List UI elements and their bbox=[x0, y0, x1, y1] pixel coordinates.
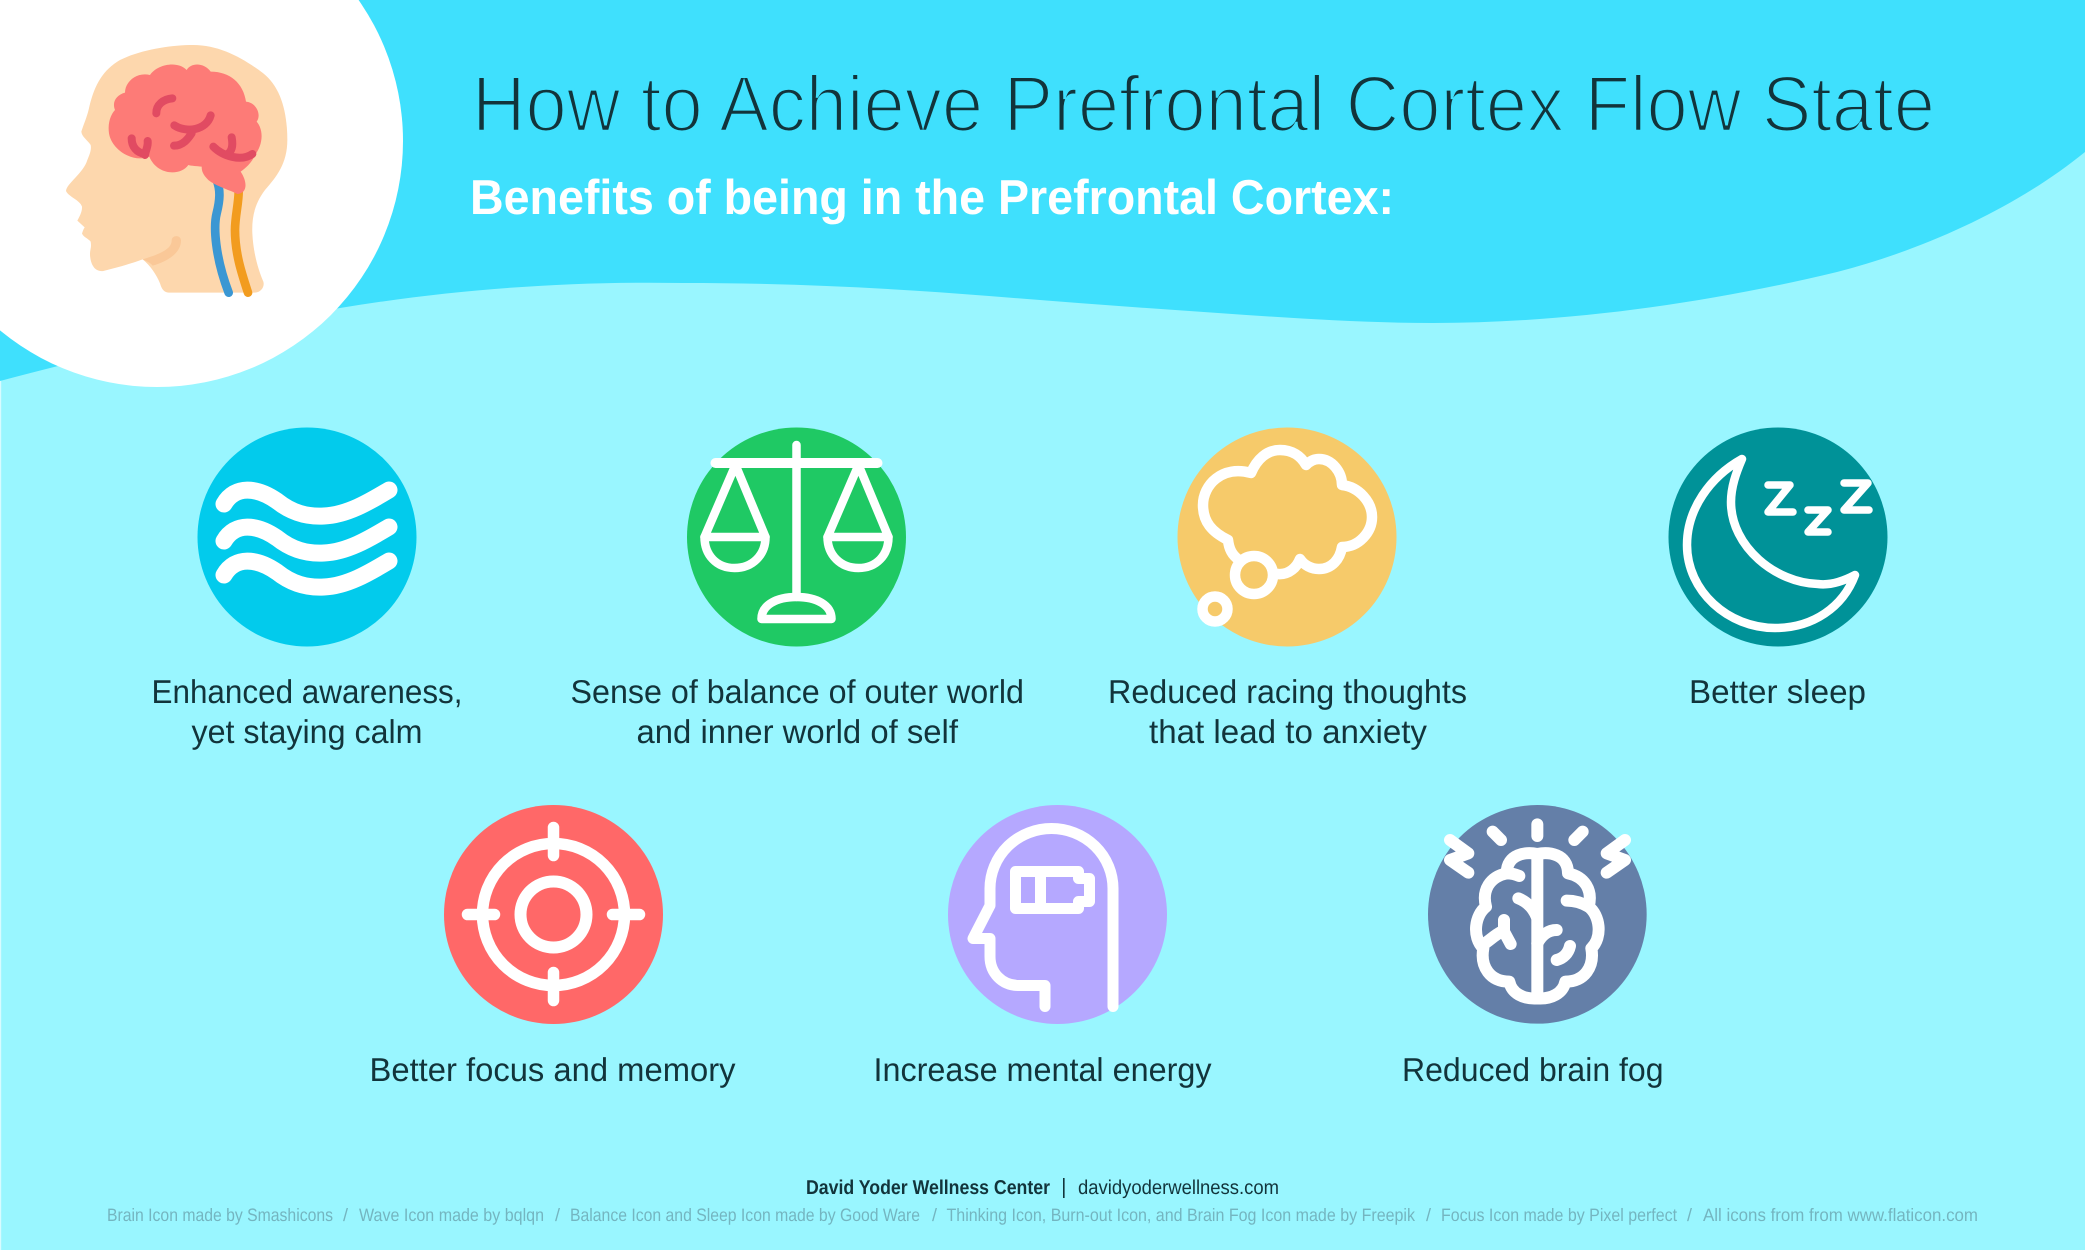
icon: waves bbox=[198, 428, 416, 646]
benefit: better sleep bbox=[1668, 428, 1888, 710]
caption: Sense of balance of outer world bbox=[570, 673, 1024, 710]
jaw shadow bbox=[143, 236, 181, 266]
footer: icon credits: / bbox=[343, 1205, 348, 1225]
footer: icon credits: Balance Icon and Sleep Icon made by Good Ware bbox=[570, 1205, 920, 1225]
icon: target bbox=[444, 805, 663, 1024]
caption: Better sleep bbox=[1689, 673, 1866, 710]
benefit: enhanced awareness bbox=[152, 428, 462, 750]
caption: that lead to anxiety bbox=[1149, 713, 1427, 750]
benefit: increase mental energy bbox=[874, 805, 1212, 1088]
caption: Reduced racing thoughts bbox=[1108, 673, 1467, 710]
icon: thought bubble bbox=[1178, 428, 1396, 646]
benefit: better focus and memory bbox=[370, 805, 736, 1088]
icon: head with brain bbox=[66, 45, 287, 293]
benefit: reduced racing thoughts bbox=[1108, 428, 1467, 750]
orange nerve bbox=[235, 192, 248, 293]
caption bbox=[570, 673, 1024, 750]
footer: icon credits: All icons from from www.flaticon.com bbox=[1703, 1205, 1978, 1225]
caption: Reduced brain fog bbox=[1402, 1051, 1664, 1088]
footer: icon credits: / bbox=[1687, 1205, 1692, 1225]
footer: icon credits: Wave Icon made by bqlqn bbox=[359, 1205, 544, 1225]
footer: icon credits: / bbox=[555, 1205, 560, 1225]
blue nerve bbox=[215, 180, 229, 293]
footer: organisation name and website: David Yoder Wellness Center bbox=[806, 1177, 1050, 1199]
footer: organisation name and website bbox=[806, 1177, 1279, 1199]
footer: icon credits: / bbox=[1426, 1205, 1431, 1225]
caption: Increase mental energy bbox=[874, 1051, 1212, 1088]
brain bbox=[109, 65, 262, 194]
white circle behind head bbox=[0, 0, 403, 387]
footer: icon credits: / bbox=[932, 1205, 937, 1225]
benefit: reduced brain fog bbox=[1402, 805, 1664, 1088]
footer: icon credits: Focus Icon made by Pixel perfect bbox=[1441, 1205, 1677, 1225]
icon: balance scale bbox=[687, 428, 906, 646]
title: How to Achieve Prefrontal Cortex Flow State bbox=[472, 59, 1935, 148]
icon: moon and zzz bbox=[1668, 428, 1888, 646]
benefit: sense of balance bbox=[570, 428, 1024, 750]
caption bbox=[152, 673, 462, 750]
caption bbox=[1108, 673, 1467, 750]
footer: icon credits: Brain Icon made by Smashicons bbox=[107, 1205, 333, 1225]
caption: yet staying calm bbox=[192, 713, 422, 750]
brain folds bbox=[132, 98, 252, 158]
caption: Better focus and memory bbox=[370, 1051, 736, 1088]
icon: head with low battery bbox=[948, 805, 1167, 1024]
head silhouette bbox=[66, 45, 287, 293]
subtitle: Benefits of being in the Prefrontal Cortex: bbox=[470, 171, 1394, 225]
footer: organisation name and website: davidyoderwellness.com bbox=[1078, 1177, 1279, 1199]
header wave band bbox=[0, 0, 2085, 381]
icon: brain with sparks bbox=[1428, 805, 1647, 1024]
caption: Enhanced awareness, bbox=[152, 673, 462, 710]
caption: and inner world of self bbox=[636, 713, 959, 750]
footer: icon credits bbox=[107, 1205, 1978, 1225]
footer: icon credits: Thinking Icon, Burn-out Icon, and Brain Fog Icon made by Freepik bbox=[946, 1205, 1416, 1225]
